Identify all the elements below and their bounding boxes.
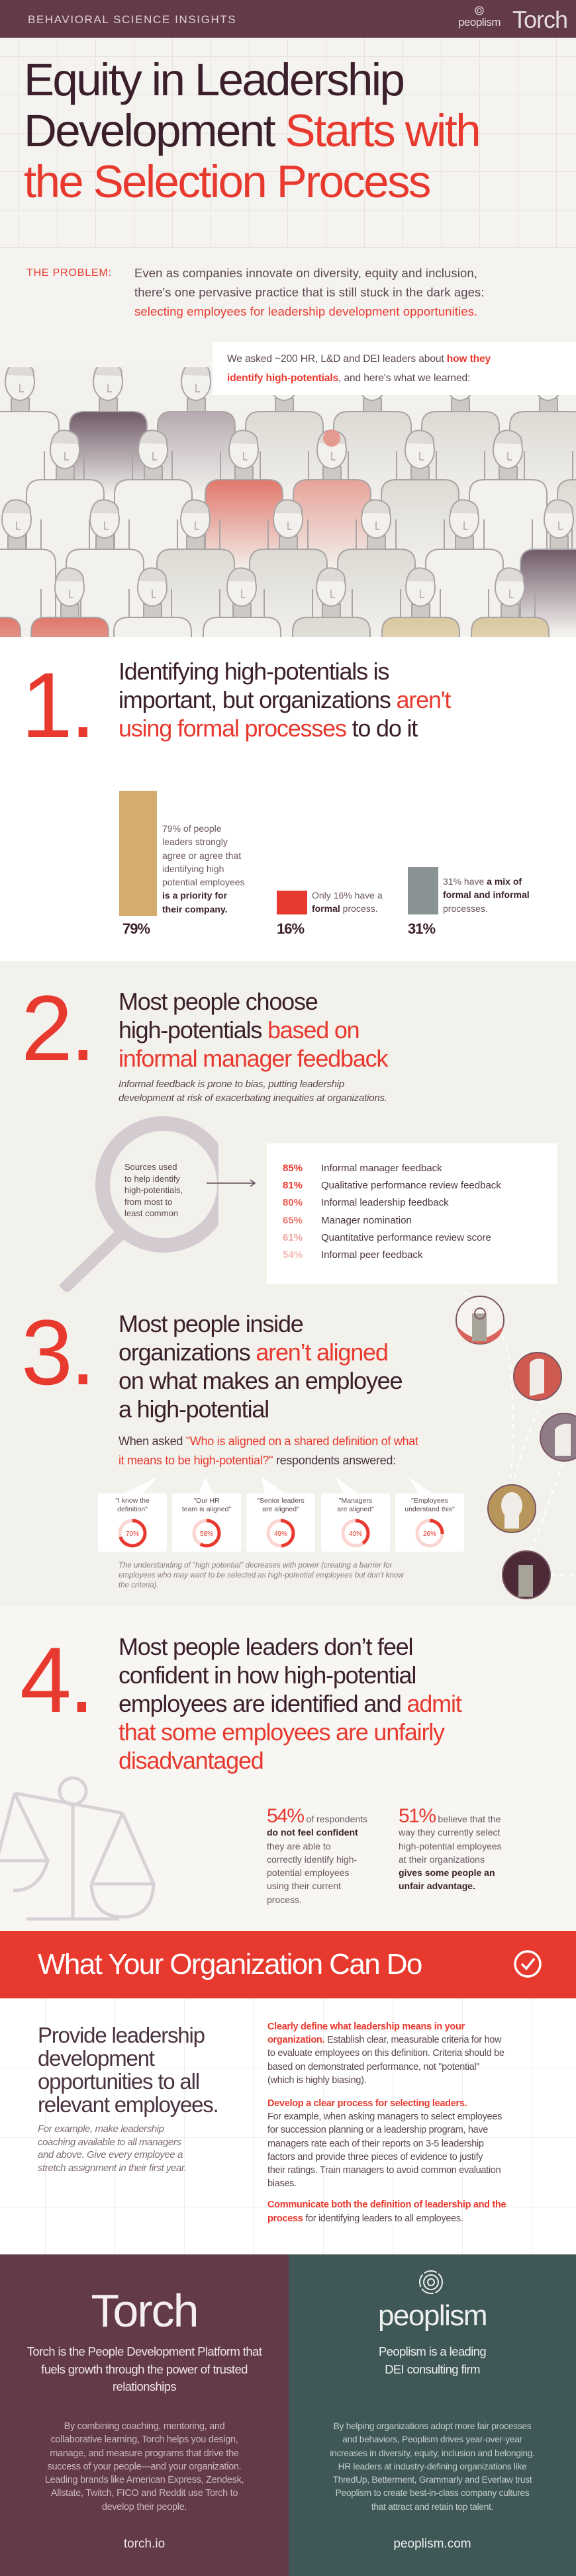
section 2 and 3 background <box>0 961 576 1606</box>
bar chart: their company. <box>162 904 228 914</box>
magnifier label <box>124 1162 183 1218</box>
action heading: opportunities to all <box>38 2069 199 2094</box>
title: the Selection Process <box>24 156 430 207</box>
rec 2: For example, when asking managers to select employees <box>267 2111 502 2122</box>
rec 1: Clearly define what leadership means in your <box>267 2021 465 2032</box>
logo: torch: Torch <box>512 6 567 33</box>
action example <box>38 2123 187 2174</box>
donut cards: 40% <box>349 1531 362 1538</box>
rec 2: factors and provide three pieces of evidence to justify <box>267 2152 483 2162</box>
stat 54%: they are able to <box>267 1841 331 1851</box>
icons: people circles <box>456 1292 576 1599</box>
donut cards: definition" <box>117 1505 148 1513</box>
bar chart: 79% of people <box>162 823 222 834</box>
hero grid background <box>0 38 576 247</box>
peoplism logo: peoplism <box>378 2299 487 2332</box>
logo: peoplism: peoplism <box>458 16 501 28</box>
title <box>24 54 479 207</box>
subtext: Informal feedback is prone to bias, putting leadership <box>119 1079 344 1090</box>
torch body <box>45 2421 244 2512</box>
stat 51%: way they currently select <box>399 1827 500 1838</box>
banner: what your organization can do <box>0 1931 576 1998</box>
donut cards: "Employees <box>411 1497 448 1505</box>
list panel: Informal leadership feedback <box>321 1197 449 1208</box>
section 3 <box>21 1292 576 1599</box>
footnote: the criteria). <box>119 1581 159 1589</box>
section 4 <box>0 1606 576 1931</box>
heading 4: that some employees are unfairly <box>119 1718 444 1746</box>
list panel: 85% <box>283 1163 303 1174</box>
number 2: 2. <box>21 976 93 1080</box>
rec 1: to evaluate employees on this definition. Criteria should be <box>267 2048 504 2059</box>
title: Development Starts with <box>24 105 479 156</box>
heading 4: Most people leaders don’t feel <box>119 1633 412 1660</box>
torch body: manage, and measure programs that drive the <box>50 2448 239 2459</box>
peoplism body: Peoplism to create best-in-class company cultures <box>336 2488 529 2498</box>
bar chart: 31% have a mix of <box>443 876 522 887</box>
magnifier label: least common <box>124 1208 178 1218</box>
banner title: What Your Organization Can Do <box>38 1948 422 1980</box>
heading 2: Most people choose <box>119 988 318 1015</box>
bar 31% <box>408 867 438 914</box>
stat 54%: do not feel confident <box>267 1827 358 1838</box>
illustration: crowd <box>0 367 576 637</box>
torch logo: Torch <box>91 2285 198 2336</box>
heading 1: important, but organizations aren't <box>119 686 450 713</box>
heading 4: confident in how high-potential <box>119 1662 416 1689</box>
heading 2: high-potentials based on <box>119 1016 359 1044</box>
peoplism body: By helping organizations adopt more fair processes <box>334 2421 531 2431</box>
rec 3: Communicate both the definition of leadership and the <box>267 2199 506 2210</box>
section 1: 16% <box>277 920 304 937</box>
heading 1 <box>119 658 452 742</box>
footnote: employees who may want to be selected as high-potential employees but don't know <box>119 1572 404 1579</box>
stat 51%: 51% believe that the <box>399 1805 501 1827</box>
heading 4: employees are identified and admit <box>119 1690 461 1717</box>
stat 51% <box>399 1805 502 1891</box>
question text: it means to be high-potential?" respondents answered: <box>119 1454 396 1467</box>
arrow <box>207 1179 256 1187</box>
intro callout box <box>213 342 576 395</box>
peoplism body: increases in diversity, equity, inclusion and belonging. <box>330 2448 535 2458</box>
bar chart: potential employees <box>162 877 245 887</box>
donut cards: "Our HR <box>193 1497 220 1505</box>
list panel: Informal peer feedback <box>321 1249 422 1261</box>
action heading: development <box>38 2046 154 2070</box>
action heading: Provide leadership <box>38 2023 205 2047</box>
peoplism body: HR leaders at industry-defining organizations like <box>338 2462 526 2471</box>
torch body: Leading brands like American Express, Zendesk, <box>45 2475 244 2485</box>
stat 54%: process. <box>267 1894 302 1905</box>
section 1: 79% <box>122 920 150 937</box>
torch body: success of your people—and your organization. <box>48 2462 241 2472</box>
heading 2 <box>119 988 388 1072</box>
donut cards: understand this" <box>405 1505 455 1513</box>
stat 51%: gives some people an <box>399 1867 495 1878</box>
bar chart: formal process. <box>312 903 378 914</box>
heading 3 <box>119 1310 402 1423</box>
list panel: 65% <box>283 1215 303 1226</box>
stat 54%: 54% of respondents <box>267 1805 367 1827</box>
heading 3: organizations aren’t aligned <box>119 1339 388 1366</box>
question text <box>119 1435 418 1467</box>
peoplism url: peoplism.com <box>393 2537 471 2551</box>
donut cards: 49% <box>274 1531 287 1538</box>
bar chart: formal and informal <box>443 889 530 900</box>
footer: torch <box>0 2254 289 2576</box>
torch body: collaborative learning, Torch helps you design, <box>50 2434 238 2445</box>
header bar <box>0 0 576 38</box>
logo: peoplism <box>458 6 501 28</box>
heading 2: informal manager feedback <box>119 1045 387 1072</box>
list panel: Informal manager feedback <box>321 1163 442 1174</box>
stat 51%: at their organizations <box>399 1854 485 1865</box>
problem text: Even as companies innovate on diversity, equity and inclusion, <box>134 266 477 280</box>
donut cards: team is aligned" <box>182 1505 231 1513</box>
peoplism body <box>330 2421 535 2512</box>
heading 3: a high-potential <box>119 1396 269 1423</box>
list panel <box>267 1143 557 1284</box>
number 3: 3. <box>21 1300 93 1404</box>
action example: stretch assignment in their first year. <box>38 2162 187 2174</box>
rec 3 <box>267 2199 506 2224</box>
action heading: relevant employees. <box>38 2092 218 2117</box>
rec 2 <box>267 2098 502 2189</box>
stat 54%: potential employees <box>267 1867 350 1878</box>
torch tagline: Torch is the People Development Platform that fuels growth through the power of trusted relationships <box>27 2344 262 2393</box>
peoplism icon <box>419 2270 443 2294</box>
torch url: torch.io <box>124 2537 165 2551</box>
number 4: 4. <box>20 1628 92 1732</box>
rec 1 <box>267 2021 504 2086</box>
question text: When asked "Who is aligned on a shared definition of what <box>119 1435 418 1448</box>
problem statement <box>26 266 485 318</box>
problem text: there's one pervasive practice that is still stuck in the dark ages: <box>134 285 485 299</box>
rec 1: based on demonstrated performance, not "potential" <box>267 2062 479 2072</box>
bar chart <box>119 791 530 937</box>
row D <box>0 568 21 770</box>
donut cards: 26% <box>423 1531 436 1538</box>
magnifier label: Sources used <box>124 1162 177 1172</box>
magnifier label: to help identify <box>124 1174 180 1183</box>
title: Equity in Leadership <box>24 54 403 105</box>
bar chart: identifying high <box>162 864 224 874</box>
subtext: development at risk of exacerbating inequities at organizations. <box>119 1092 387 1104</box>
number 1: 1. <box>21 653 93 757</box>
heading 3: Most people inside <box>119 1310 303 1337</box>
peoplism tagline <box>379 2344 486 2376</box>
heading 3: on what makes an employee <box>119 1367 402 1394</box>
list panel: 80% <box>283 1197 303 1208</box>
heading 4: disadvantaged <box>119 1747 264 1774</box>
peoplism body: that attract and retain top talent. <box>371 2502 493 2512</box>
heading 4 <box>119 1633 462 1774</box>
action heading <box>38 2023 218 2117</box>
rec 2: for succession planning or a leadership program, have <box>267 2125 488 2135</box>
bar 16% <box>277 891 307 914</box>
subtext <box>119 1079 387 1104</box>
list panel: Quantitative performance review score <box>321 1232 491 1243</box>
bar chart: leaders strongly <box>162 836 228 847</box>
icon: magnifier <box>59 1116 218 1292</box>
heading 1: Identifying high-potentials is <box>119 658 389 685</box>
stat 51%: unfair advantage. <box>399 1881 475 1891</box>
intro callout box: We asked ~200 HR, L&D and DEI leaders about how they <box>227 353 491 365</box>
donut cards <box>98 1477 464 1552</box>
peoplism body: ThredUp, Betterment, Grammarly and Everlaw trust <box>333 2475 532 2485</box>
donut cards: "I know the <box>115 1497 150 1505</box>
bar chart: Only 16% have a <box>312 890 383 901</box>
list panel: Qualitative performance review feedback <box>321 1180 501 1191</box>
magnifier label: from most to <box>124 1196 172 1207</box>
peoplism body: and behaviors, Peoplism drives year-over-year <box>342 2434 522 2444</box>
bar chart: is a priority for <box>162 890 227 901</box>
rec 2: Develop a clear process for selecting leaders. <box>267 2098 467 2109</box>
header label: BEHAVIORAL SCIENCE INSIGHTS <box>28 13 236 26</box>
problem label: THE PROBLEM: <box>26 267 112 279</box>
torch body: By combining coaching, mentoring, and <box>64 2421 224 2432</box>
torch body: develop their people. <box>102 2502 187 2512</box>
footnote: The understanding of "high potential" decreases with power (creating a barrier for <box>119 1562 392 1570</box>
donut cards: "Senior leaders <box>257 1497 305 1505</box>
stat 51%: high-potential employees <box>399 1841 502 1851</box>
action example: and above. Give every employee a <box>38 2149 183 2160</box>
section 1 <box>0 637 576 961</box>
row C <box>0 500 56 701</box>
list panel: Manager nomination <box>321 1215 412 1226</box>
row B <box>26 430 104 632</box>
section 2 <box>21 976 557 1292</box>
icon: check circle <box>514 1950 542 1978</box>
bar chart: processes. <box>443 903 488 914</box>
stat 54%: correctly identify high- <box>267 1854 357 1865</box>
torch body: Allstate, Twitch, FICO and Reddit use Torch to <box>51 2488 238 2499</box>
icon: scales <box>0 1776 155 1920</box>
intro callout box: identify high-potentials, and here's what we learned: <box>227 373 470 384</box>
peoplism tagline: Peoplism is a leading <box>379 2344 486 2358</box>
action example: For example, make leadership <box>38 2123 164 2135</box>
action example: coaching available to all managers <box>38 2137 181 2148</box>
footnote <box>119 1562 404 1589</box>
rec 1: organization. Establish clear, measurable criteria for how <box>267 2035 501 2045</box>
magnifier label: high-potentials, <box>124 1185 183 1195</box>
donut cards: 70% <box>126 1531 139 1538</box>
donut cards: "Managers <box>339 1497 372 1505</box>
rec 1: (which is highly biasing). <box>267 2075 366 2086</box>
list panel: 61% <box>283 1232 303 1243</box>
list panel: 54% <box>283 1249 303 1261</box>
action section <box>0 1998 576 2254</box>
stat 54% <box>267 1805 367 1905</box>
donut cards: are aligned" <box>262 1505 299 1513</box>
recommendations <box>267 2021 506 2224</box>
rec 2: biases. <box>267 2178 297 2189</box>
section 1: 31% <box>408 920 435 937</box>
peoplism tagline: DEI consulting firm <box>385 2362 480 2376</box>
rec 3: process for identifying leaders to all employees. <box>267 2213 463 2224</box>
donut cards: 58% <box>200 1531 213 1538</box>
donut cards: are aligned" <box>337 1505 374 1513</box>
list panel: 81% <box>283 1180 303 1191</box>
bar chart: agree or agree that <box>162 850 241 861</box>
problem text: selecting employees for leadership development opportunities. <box>134 304 477 318</box>
rec 2: their ratings. Train managers to avoid common evaluation <box>267 2165 501 2176</box>
rec 2: managers rate each of their reports on 3-5 leadership <box>267 2139 484 2149</box>
heading 1: using formal processes to do it <box>119 715 417 742</box>
footer: peoplism <box>289 2254 576 2576</box>
problem text <box>134 266 485 318</box>
row A <box>0 362 59 564</box>
bar 79% <box>119 791 157 916</box>
stat 54%: using their current <box>267 1881 341 1891</box>
